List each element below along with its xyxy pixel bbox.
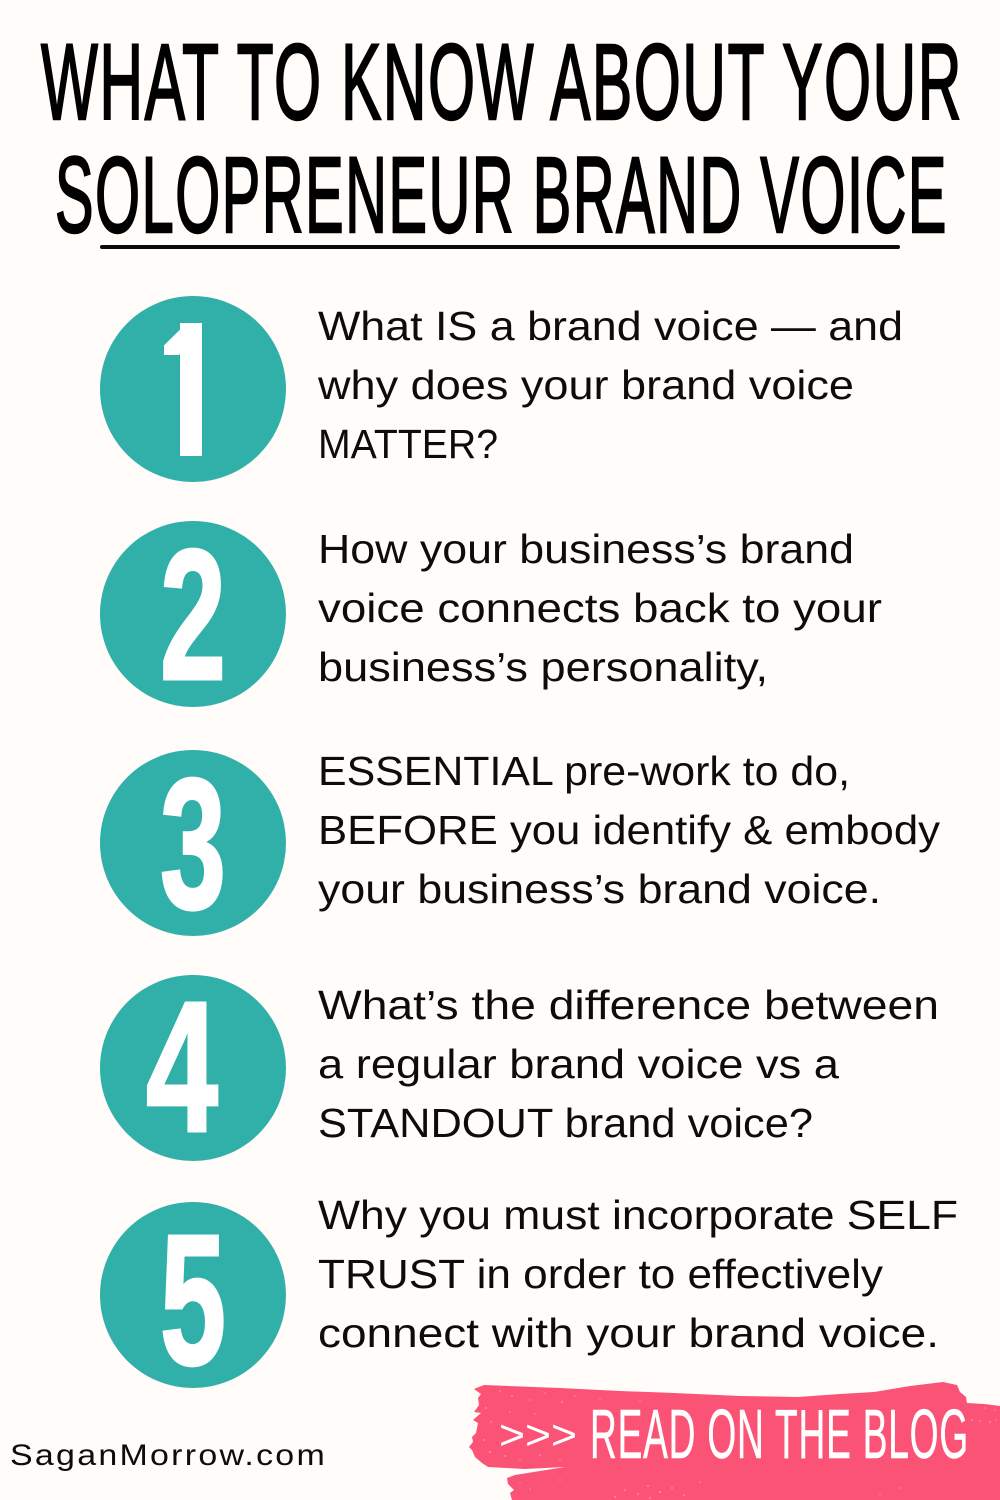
text: item 1: What IS a brand voice — and — [318, 303, 903, 349]
item 4 — [100, 964, 939, 1171]
text: item 4: a regular brand voice vs a — [318, 1041, 839, 1087]
speckles — [483, 1390, 996, 1499]
text: item 3 — [318, 748, 941, 912]
text: item 5: connect with your brand voice. — [318, 1310, 939, 1356]
text: item 2: business’s personality, — [318, 644, 768, 690]
icon: number 4 circle: 4 — [146, 964, 218, 1171]
text: item 5 — [318, 1192, 958, 1356]
text: item 3: BEFORE you identify & embody — [318, 807, 941, 853]
icon: number 5 circle: 5 — [160, 1197, 226, 1404]
icon: number 2 circle: 2 — [160, 512, 226, 719]
text: item 4 — [318, 982, 939, 1146]
text: item 2: How your business’s brand — [318, 526, 854, 572]
item 2 — [100, 512, 882, 719]
text: item 4: STANDOUT brand voice? — [318, 1100, 813, 1146]
icon: number 3 circle — [100, 741, 286, 948]
text: item 3: your business’s brand voice. — [318, 866, 881, 912]
text: item 2: voice connects back to your — [318, 585, 882, 631]
text: item 5: TRUST in order to effectively — [318, 1251, 884, 1297]
text: item 2 — [318, 526, 882, 690]
call to action banner — [469, 1382, 1000, 1500]
icon: number 2 circle — [100, 512, 286, 719]
icon: number 1 circle — [100, 296, 286, 482]
website url: SaganMorrow.com — [10, 1439, 327, 1472]
text: item 5: Why you must incorporate SELF — [318, 1192, 958, 1238]
item 5 — [100, 1192, 958, 1404]
text: item 4: What’s the difference between — [318, 982, 939, 1028]
text: item 1: why does your brand voice — [317, 362, 854, 408]
item 3 — [100, 741, 941, 948]
arrows text: >>> — [499, 1411, 577, 1458]
icon: number 4 circle — [100, 964, 286, 1171]
pink brush stroke — [469, 1382, 1000, 1500]
icon: number 3 circle: 3 — [160, 741, 226, 948]
item 1 — [100, 296, 900, 482]
text: item 3: ESSENTIAL pre-work to do, — [318, 748, 850, 794]
text: item 1 — [317, 303, 903, 467]
icon: number 1 circle: 1 — [155, 288, 223, 495]
text: item 1: MATTER? — [318, 421, 498, 467]
title — [41, 21, 963, 255]
icon: number 5 circle — [100, 1197, 286, 1404]
